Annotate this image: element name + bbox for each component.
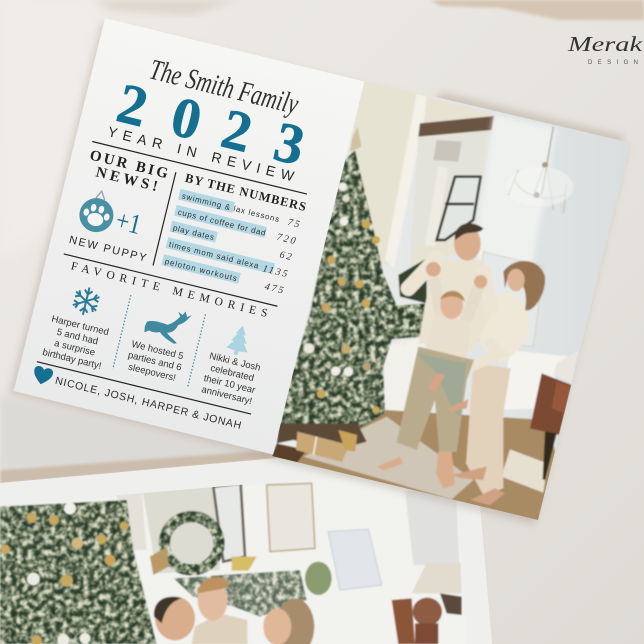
baby	[192, 613, 247, 644]
shadow above main card	[436, 92, 625, 146]
gold star decorations	[232, 557, 257, 571]
memory text: anniversary: anniversary!	[200, 384, 253, 407]
watermark: Meraki Design logo: Meraki	[567, 32, 644, 56]
memory text: parties: parties and 6	[127, 350, 183, 374]
memory text: anniversary	[200, 351, 262, 407]
memory text: Harper: 5 and had	[56, 327, 99, 347]
year: 2023: 0	[165, 85, 208, 153]
leather chair	[392, 598, 415, 644]
small rug	[501, 449, 547, 493]
tree topper star	[350, 127, 362, 152]
picture frame two	[328, 529, 382, 590]
garland	[390, 302, 426, 340]
bar: swimming and lax lessons: 75	[286, 217, 303, 231]
heading: by the numbers: BY THE NUMBERS	[184, 171, 308, 214]
back wall	[272, 96, 631, 456]
panel: favorite memories	[41, 259, 275, 409]
heading: our big news: OUR BIG	[88, 148, 170, 182]
shadow under main card	[9, 23, 628, 525]
gift box	[296, 430, 357, 462]
bar: swimming and lax lessons: swimming & lax lessons	[181, 192, 280, 224]
bar: swimming and lax lessons	[178, 189, 303, 231]
bar: peloton workouts: peloton workouts	[164, 257, 238, 283]
panel: our big news	[68, 148, 170, 265]
wreath	[164, 517, 219, 570]
memory text: Harper: birthday party!	[41, 347, 102, 372]
memory text: anniversary: celebrated	[209, 363, 255, 384]
picture frame one	[267, 483, 315, 552]
bar: play dates	[169, 221, 295, 263]
bright wall panel	[477, 116, 556, 262]
bar: cups of coffee for dad: cups of coffee for dad	[177, 208, 266, 238]
leather chair	[530, 350, 578, 480]
heading: our big news: NEWS!	[94, 165, 159, 195]
label: new puppy: NEW PUPPY	[68, 234, 148, 265]
man	[155, 596, 195, 640]
bar: times mom said alexa: times mom said alexa	[168, 240, 260, 271]
main card: year in review panel	[14, 18, 364, 454]
left wall	[348, 80, 426, 266]
chandelier	[507, 127, 573, 213]
heading: our big news	[84, 148, 170, 197]
woman	[452, 261, 545, 505]
bar: peloton workouts: 475	[263, 281, 286, 297]
year: 2023: 2	[111, 72, 154, 140]
mantel garland	[173, 570, 307, 617]
subtitle: year in review: YEAR IN REVIEW	[106, 123, 296, 184]
large rug	[303, 417, 473, 499]
duct	[433, 140, 462, 162]
year: 2023	[111, 72, 311, 178]
icon: leaping reindeer	[142, 303, 192, 346]
ceiling beam	[418, 116, 494, 137]
memory text: parties	[124, 339, 185, 385]
ornaments	[304, 182, 407, 414]
icon: snowflake	[71, 285, 101, 318]
memory text: anniversary: their 10 year	[202, 373, 256, 396]
panel: by the numbers	[161, 170, 308, 297]
icon: tree	[225, 323, 254, 357]
child	[417, 275, 487, 417]
main photo: family by the Christmas tree	[270, 80, 633, 523]
dark wreath	[398, 258, 427, 303]
bar: peloton workouts	[161, 254, 287, 297]
doorway interior	[410, 97, 495, 267]
lower card shadow	[0, 451, 290, 484]
bar: cups of coffee for dad	[174, 205, 299, 247]
title: The Smith Family: The Smith Family	[146, 54, 302, 121]
woman	[276, 598, 314, 644]
icon: heart	[31, 365, 54, 386]
memory text: Harper	[41, 313, 111, 372]
man	[377, 223, 493, 488]
lower card with second family photo	[0, 451, 492, 644]
plus one: +1	[113, 205, 144, 241]
bar: play dates: play dates	[172, 223, 215, 242]
memory text: parties: We hosted 5	[130, 339, 185, 362]
bar: times mom said alexa: 1135	[261, 263, 290, 280]
heading: favorite memories: FAVORITE MEMORIES	[70, 260, 269, 320]
year: 2023: 2	[216, 97, 258, 165]
watermark: Meraki Design logo	[567, 32, 644, 66]
footer: family names	[31, 365, 243, 433]
small potted plant	[305, 562, 332, 595]
lower tree	[0, 500, 157, 644]
memory text: anniversary: Nikki & Josh	[208, 351, 262, 374]
wood floor	[296, 409, 556, 520]
year: 2023: 3	[268, 110, 311, 178]
bar: play dates: 62	[278, 249, 295, 263]
pillar	[385, 94, 428, 268]
memory text: parties: sleepovers!	[127, 362, 177, 384]
names: NICOLE, JOSH, HARPER & JONAH	[54, 375, 242, 432]
bar: times mom said alexa	[165, 237, 291, 280]
christmas tree	[280, 150, 400, 430]
lamp shade	[412, 563, 462, 593]
icon: ornament with paw	[76, 187, 119, 236]
mirror frame	[477, 252, 543, 347]
lower photo	[0, 468, 467, 644]
memory text: Harper: Harper turned	[50, 314, 110, 338]
dark floor under tree	[270, 443, 307, 463]
watermark: Meraki Design logo: DESIGN	[588, 60, 638, 66]
bar: cups of coffee for dad: 720	[276, 232, 299, 247]
card paper	[14, 18, 364, 454]
window	[437, 177, 481, 240]
tree basket	[276, 422, 367, 446]
white console	[384, 339, 425, 411]
memory text: Harper: a surprise	[53, 338, 96, 359]
lower card paper	[0, 458, 492, 644]
